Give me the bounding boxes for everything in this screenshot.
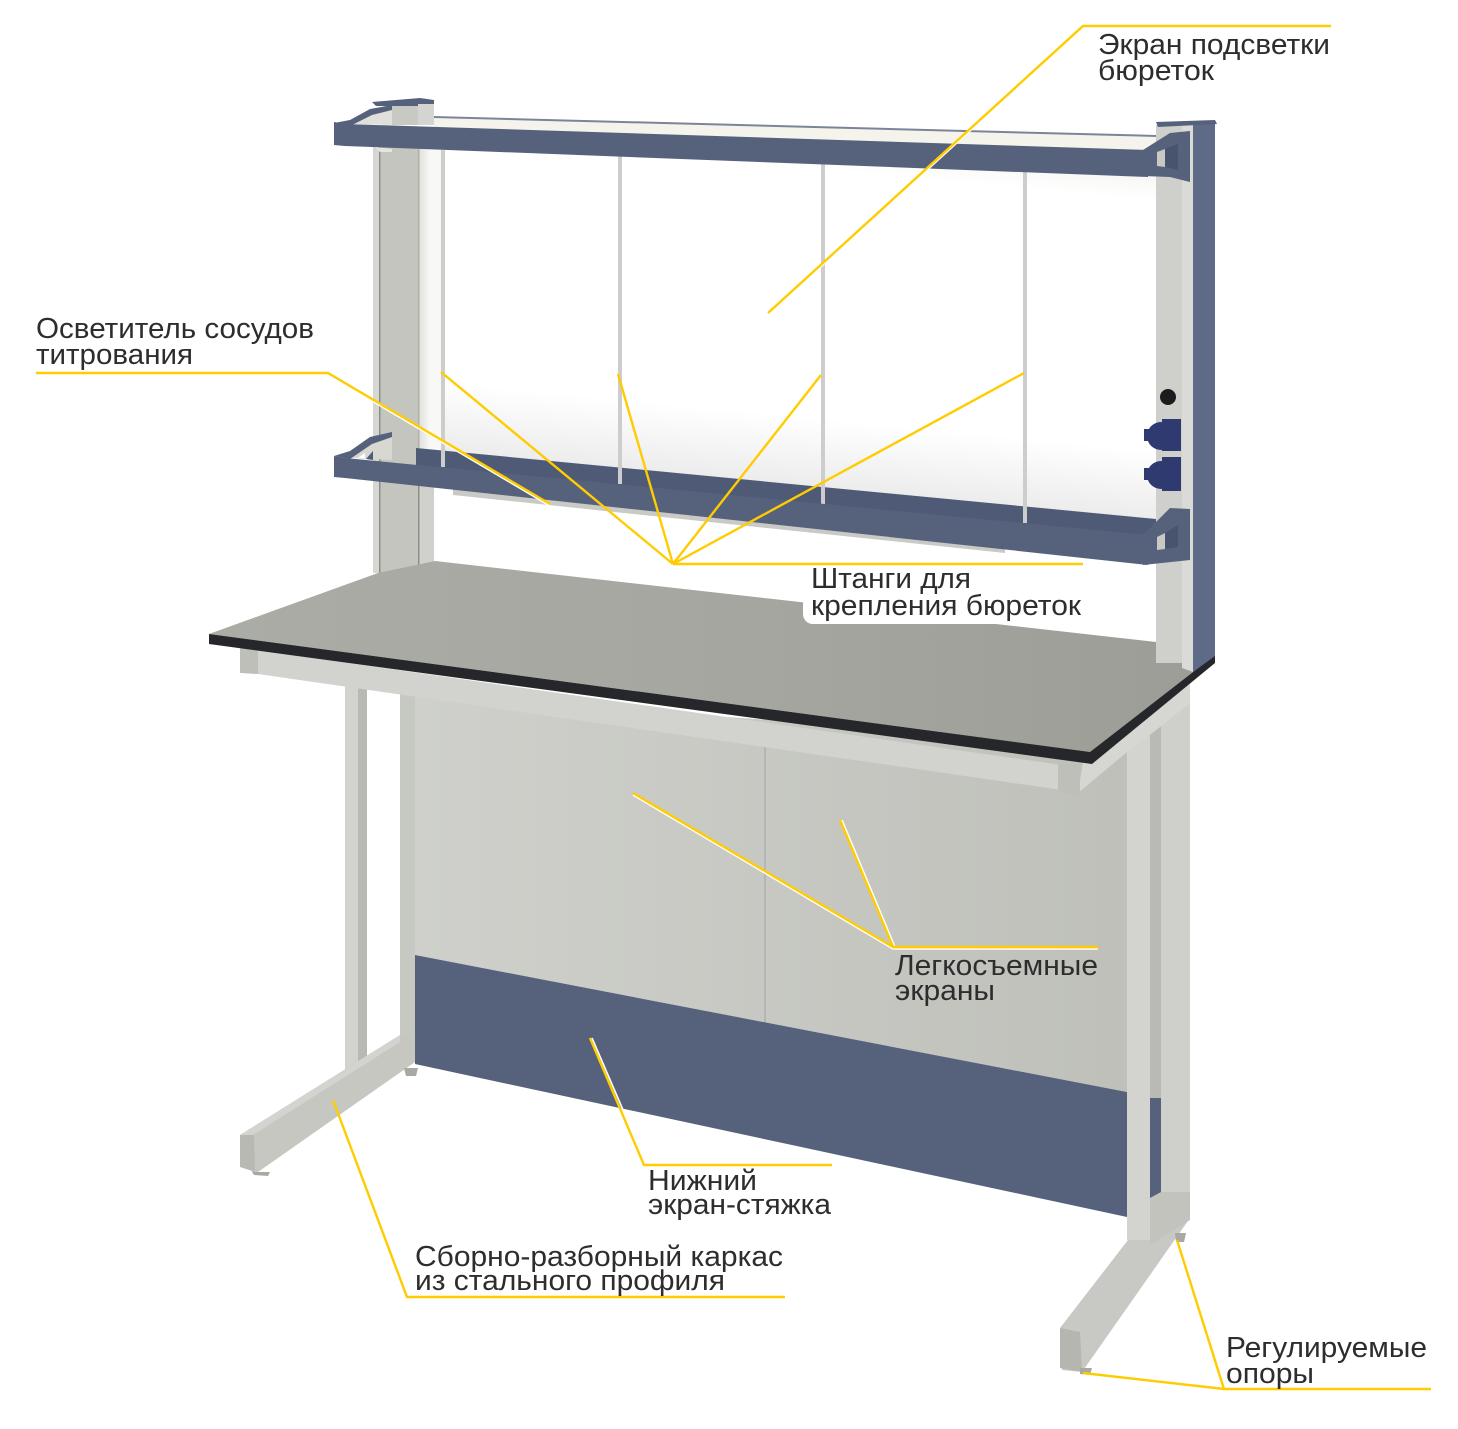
label background (803, 566, 1085, 624)
lower right handle (1143, 508, 1190, 565)
right front post (1127, 730, 1150, 1240)
screen divider (764, 745, 766, 1023)
left front post (345, 685, 367, 1070)
left rear post (400, 690, 416, 1042)
burette rods (441, 150, 1027, 523)
right column (1156, 120, 1217, 672)
glass top strip (434, 117, 1156, 155)
lower tie screen (415, 955, 1127, 1217)
label: backlight screen: бюреток (1098, 55, 1214, 87)
left column (373, 145, 434, 573)
right rear post (1150, 690, 1190, 1220)
right foot (1060, 1192, 1190, 1375)
top shelf bar (334, 122, 1148, 177)
label: steel frame: из стального профиля (415, 1265, 725, 1297)
callout: adjustable feet (1083, 1240, 1431, 1390)
label: lower tie screen: экран-стяжка (648, 1189, 832, 1221)
label: lower tie screen: Нижний (648, 1165, 757, 1197)
titration vessel lamp (453, 489, 1005, 553)
tabletop dark edge (209, 634, 1215, 764)
label: adjustable feet: Регулируемые (1226, 1332, 1427, 1364)
label: removable screens: Легкосъемные (895, 950, 1098, 982)
lower shelf bar (334, 456, 1148, 565)
callout: burette rods (441, 372, 1083, 622)
tabletop (209, 561, 1215, 752)
label: steel frame: Сборно-разборный каркас (415, 1241, 783, 1273)
left column cap (372, 98, 434, 106)
label: burette rods: крепления бюреток (811, 590, 1081, 622)
lower left bracket (334, 432, 392, 460)
callout: removable screens (633, 793, 1098, 1007)
socket lower (1144, 457, 1181, 491)
backlit screen (418, 148, 1156, 530)
callout: vessel lamp (36, 313, 550, 506)
label: burette rods: Штанги для (811, 563, 971, 595)
label: adjustable feet: опоры (1226, 1358, 1314, 1390)
removable screens (415, 695, 1127, 1092)
top right handle (1143, 131, 1190, 182)
left foot (240, 1035, 418, 1176)
label: backlight screen: Экран подсветки (1098, 29, 1330, 61)
upper shelf structure (334, 98, 1217, 672)
label: vessel lamp: Осветитель сосудов (36, 313, 314, 345)
lower shelf back (416, 448, 1156, 545)
label: removable screens: экраны (895, 975, 995, 1007)
callout: steel frame (333, 1100, 785, 1297)
column over table (1156, 600, 1215, 672)
top left bracket (334, 105, 392, 152)
apron under tabletop (240, 646, 1190, 795)
callout: lower tie screen (590, 1038, 832, 1221)
label: vessel lamp: титрования (36, 339, 193, 371)
socket upper (1144, 419, 1181, 451)
switch button (1160, 389, 1176, 405)
lower frame and panels (240, 685, 1190, 1375)
callout: backlight screen (768, 26, 1331, 315)
